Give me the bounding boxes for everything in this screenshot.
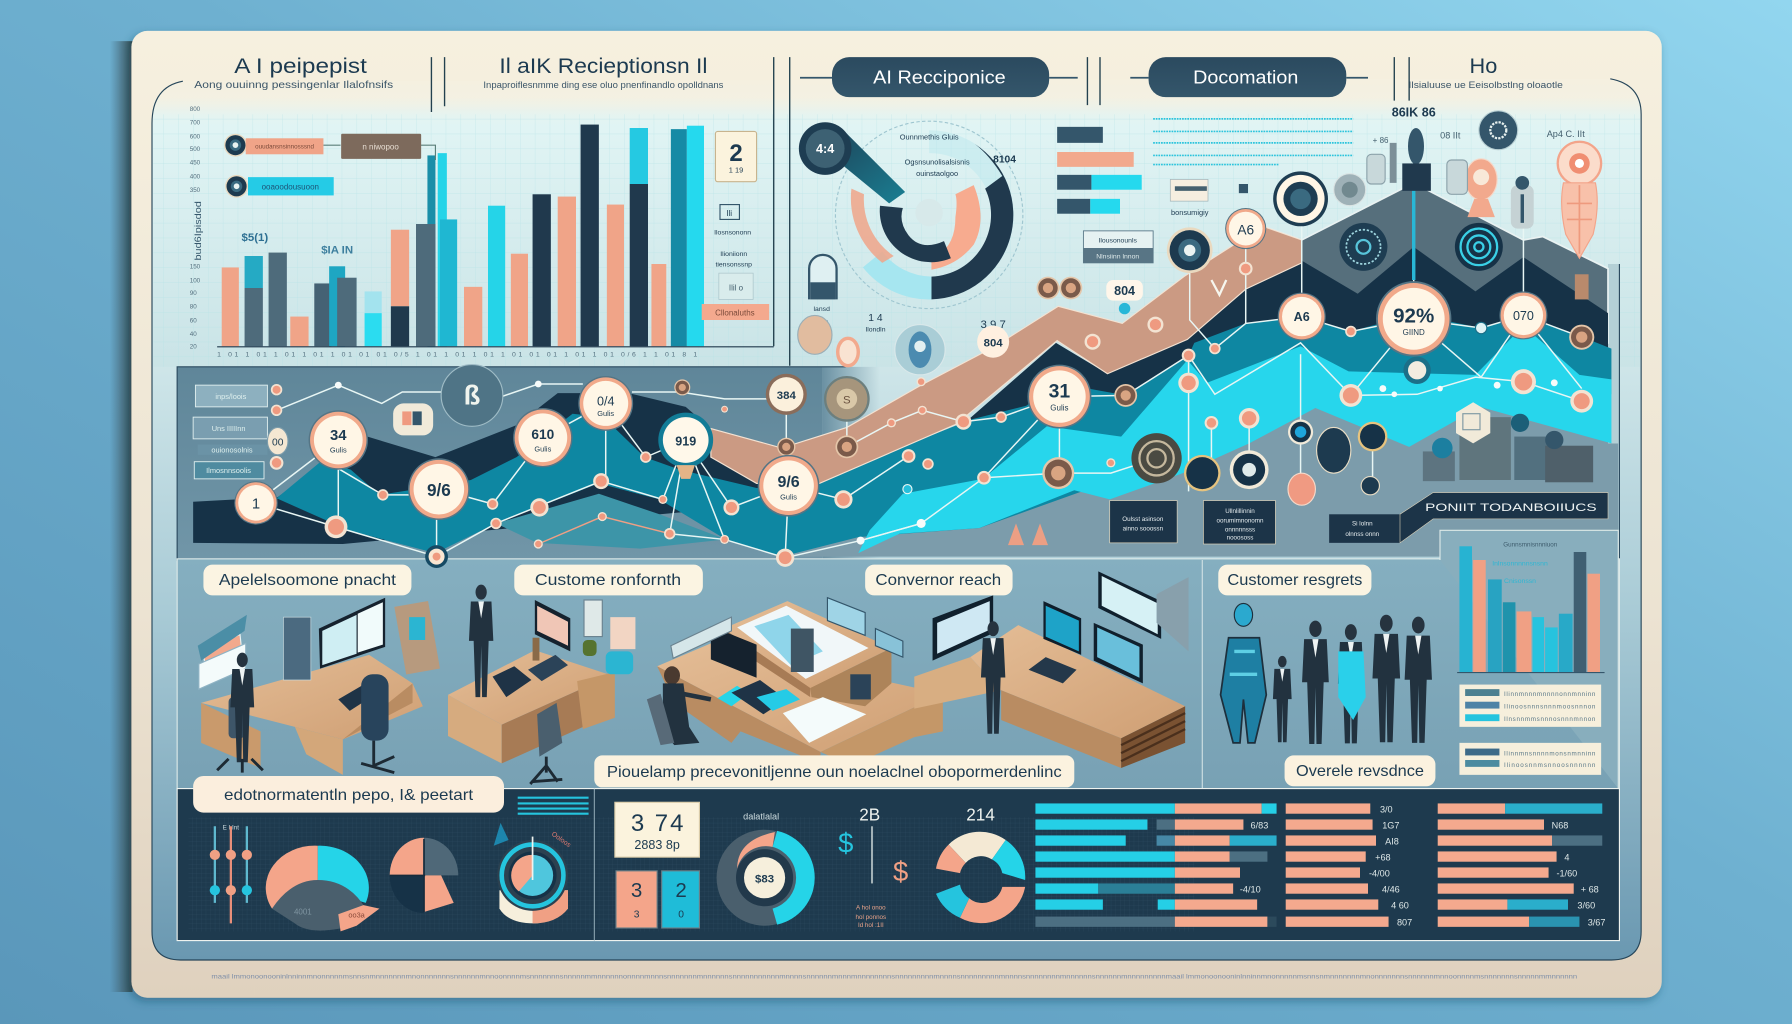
x axis labels: 1 01 1 01 1 01 1 01 1 01 01 01 0/5 1 01 1 01 1 01 1 01 01 01 1 01 1 01 0/6 1 1 01 8 1 [217,352,697,359]
heading: AI pipeline [194,53,393,91]
pill label: Application [203,565,411,595]
left flow nodes: ß [464,380,480,411]
pie chart one [266,846,379,931]
stat card: 3 74: 2883 8p [634,838,680,852]
y axis labels: 90 [190,290,197,297]
panel: bottom dark dashboard [177,789,1619,941]
y axis labels: 450 [190,160,201,167]
bar table: column two: 4/46 [1382,885,1400,895]
dollar chart: 2B [859,805,880,825]
dark info boxes: nooososs [1227,534,1253,541]
left flow labels: Ilmosnnsoolis [206,466,251,475]
sliders [210,825,252,923]
callout: peach note: Cllonaluths [715,308,755,317]
left flow nodes: S [843,394,851,406]
dark info boxes [1110,501,1400,544]
y axis labels: 500 [190,146,201,153]
dollar chart: hol ponnos [856,914,886,921]
bar table: column three [1438,803,1605,928]
y axis labels: 350 [190,187,201,194]
left flow big value nodes: 9/6 [777,474,800,491]
small chart notes: Ilioniionn [720,251,747,258]
left mini icons: lansd [814,306,830,313]
dark info boxes: Oulsst asinson [1122,516,1164,523]
stat card: 2: 1 19 [729,166,743,175]
figure: suit four [1405,617,1432,743]
heading: AI receptionist: Il aIK Recieptionsn Il [499,53,707,78]
right flow nodes: Gulis [1050,403,1069,412]
donut chart: AI receptionist [799,121,1023,309]
pill label: overall revenue [1285,755,1435,786]
header dividers [431,57,1409,366]
left flow big value nodes: Gulis [330,446,347,455]
right flow nodes: A6 [1294,310,1310,324]
y axis labels: 60 [190,317,197,324]
footer note: maail lmmonoonooninlnninnmnonnnnnmsnnsnmnnnnnnnmnonnnnnnnsnnnnnnmnnoonnnnmsnnnnnnnsnnnnnmmnnnnnnonnnnmnnnsnnnnnnnmnnnnnnsnnnnnnnnnnnmnnnnsnnnnnnmnnnmnnnnnnnnsnnnnnnnnnmnnnnsnnnnnnnnnmnnnnsnnnnnnnnmnnnnnnsnnnnnnmnnnnnnnnnmaail lmmonoonooninlnninnmnonnnnnmsnnsnmnnnnnnnmnonnnnnnnsnnnnnnmnnoonnnnmsnnnnnnnsnnnnnmmnnnnnn [211,973,1578,980]
bar table: column three: + 68 [1581,885,1599,895]
dark info boxes: oorumimnonomn [1216,517,1264,524]
legend card one: Ilnsnnmmsnnnosnnnmnnon [1504,716,1596,723]
pill label: overall revenue: Overele revsdnce [1296,763,1424,780]
figure: suit two [1302,621,1329,744]
bar table: column two: +68 [1375,853,1391,863]
left flow big value nodes: 384 [777,390,796,402]
figure: suit one [1273,656,1292,742]
target gauge [494,823,572,923]
bar table: column three: 3/67 [1588,918,1605,928]
scene: desk four [914,571,1189,768]
pill label: Customer regrets [1218,565,1371,595]
donut chart: bottom centre: dalatlalal [743,811,779,821]
legend card one: Ilinoosnnnsnnnmoosnnnon [1504,704,1596,711]
panel: process flow band [177,367,1618,561]
target gauge: Ooloos [550,831,572,849]
cyan lines [518,798,589,814]
small chart notes: tiensonssnp [715,261,752,268]
y axis labels [190,106,203,351]
heading: AI pipeline: A I peipepist [234,53,367,78]
left flow big value nodes: Gulis [597,409,614,418]
legend card one [1459,685,1601,727]
bar table: column three: -1/60 [1556,869,1577,879]
left flow nodes [267,365,971,568]
bar table: column two: 3/0 [1380,805,1393,815]
pill heading: AI Receptionist [800,57,1078,97]
left flow big value nodes: 1 [252,497,260,513]
heading: Ho: Ho [1470,53,1497,78]
mini document icon: bonsumigiy [1171,208,1209,217]
bar table: column two: 4 60 [1391,901,1409,911]
pill label: Customer: Custome ronfornth [535,572,681,589]
sliders: E I Int [223,825,239,832]
dollar chart: Id hol :1II [858,922,884,929]
value label: $IA IN [321,245,353,257]
scene: desk one [198,598,440,775]
right flow nodes: GIIND [1403,328,1425,337]
bar table: column two: 807 [1397,918,1412,928]
pill label: Conversion reach: Convernor reach [875,572,1001,589]
pointer with value [799,122,905,203]
dollar chart: $ [838,828,853,859]
right flow nodes: A6 [1237,222,1254,237]
panel: upper chart background [153,97,1640,367]
pill label: bottom left: edotnormatentln pepo, I& peetart [224,787,474,804]
panel: right lower box [1440,530,1618,789]
pie chart one: oo3a [348,911,366,920]
stat tile: cyan: 0 [678,910,684,921]
panel: mid section [177,559,1619,790]
dollar chart: A hol onoo [856,905,886,912]
pie chart one: 4001 [294,907,312,916]
left flow labels: Uns IIIIInn [212,424,245,433]
pill label: bottom center [594,755,1074,787]
callout: peach legend: n niwopoo [362,143,399,152]
small chart notes: Ilosnsononn [714,229,751,236]
pill label: Customer [514,565,703,595]
left mini icons: 1 4 [868,313,883,324]
left flow big value nodes: 9/6 [427,480,451,500]
bar table: column three: N68 [1552,821,1568,831]
dollar chart [838,805,908,929]
callout: peach legend: ouudansnsinnosssnd [255,144,315,151]
donut captions: Ogsnsunolisalsisnis [905,158,970,167]
donut captions [900,132,1016,178]
left mini icons: 804 [1114,284,1135,298]
top right values and icons: 08 IIt [1440,130,1461,140]
bar table: column one [1035,803,1277,927]
value labels: $5(1) [242,232,268,244]
small info box [1083,231,1153,263]
pill heading: AI Receptionist: AI Recciponice [873,66,1006,87]
small chart notes: Ilil o [729,283,744,292]
icon: peach bulb figure [1558,142,1601,258]
y axis labels: 700 [190,120,201,127]
left mini icons: sinns [815,319,829,325]
top right values and icons: Ap4 C. IIt [1547,129,1585,139]
top right values and icons: + 86 [1373,136,1389,145]
pointer with value: 4:4 [816,142,834,156]
small info box: Ilousonounls [1098,237,1138,244]
donut captions: ouinstaolgoo [916,169,958,178]
y axis labels: 400 [190,173,201,180]
donut captions: Ounnmethis Gluis [900,132,959,141]
bar table: column two: 1G7 [1382,821,1399,831]
bar table: column three: 3/60 [1577,901,1595,911]
mini document icon [1170,179,1248,217]
donut captions: 8104 [993,154,1016,165]
left flow big value nodes [234,374,819,525]
y axis labels: 600 [190,133,201,140]
dark info boxes: Si lolnn [1352,521,1373,528]
y axis labels: 100 [190,277,201,284]
divider line [1201,560,1203,789]
stat tile: peach: 3 [634,910,640,921]
ring chart [936,805,1025,923]
left flow big value nodes: Gulis [534,444,552,453]
left flow big value nodes: 34 [330,428,347,444]
left flow labels: ouionosolnis [211,446,253,455]
heading: Ho: Ilsialuuse ue Eeisolbstlng oloaotle [1409,80,1563,90]
heading: AI receptionist: Inpaproiflesnmme ding ese oluo pnenfinandlo opolldnans [483,80,724,90]
bar table: column one: 6/83 [1251,821,1268,831]
legend card one: Ilinnmnnnmnnnnonnmnninn [1504,691,1596,698]
bar chart: main [190,106,774,359]
top right values and icons: 86IK 86 [1392,106,1436,120]
left flow big value nodes: 610 [531,427,555,442]
callout: cyan legend [225,175,334,198]
right flow nodes [977,171,1594,505]
stat tile: peach: 3 [631,879,642,902]
left mini icons: 3 9 7 [980,319,1006,331]
legend card two [1459,743,1601,775]
mini bar chart: Gunnsmnisnnniuon [1503,541,1558,548]
small chart notes [714,205,753,299]
banner: point commodities [1400,493,1608,543]
left mini icons: 804 [984,337,1003,349]
y axis labels: 80 [190,304,197,311]
scene: desk two [448,585,635,784]
left mini icons: Ilondln [865,326,886,333]
pill heading: Documentation [1130,57,1368,97]
frame fill with curved corners [152,79,1641,960]
dark info boxes: olnnss onnn [1345,531,1380,538]
right flow nodes: 31 [1049,381,1070,403]
small info box: Nlnsiinn lnnon [1096,253,1139,260]
left flow big value nodes: 919 [675,435,696,449]
pie chart two [390,838,458,913]
pill label: bottom left [193,776,504,813]
pill label: Customer regrets: Customer resgrets [1227,572,1362,589]
card left shadow [110,41,133,992]
mini bar chart [1457,541,1605,673]
legend bars [1057,127,1142,214]
left flow big value nodes: Gulis [780,492,797,501]
bars [217,125,774,347]
ring chart: 214 [966,805,995,825]
figure: robot [1221,603,1266,743]
dollar chart: $ [893,856,908,887]
icon cluster [1379,379,1593,482]
dark info boxes: Ullnlillinnin [1225,508,1255,515]
heading: AI pipeline: Aong ouuinng pessingenlar Ilalofnsifs [194,80,393,91]
left flow labels [193,385,267,479]
dark info boxes: ainno sooossn [1123,525,1164,532]
stat tile: cyan: 2 [675,879,687,902]
banner: point commodities: PONIIT TODANBOIIUCS [1425,502,1597,514]
y axis labels: 20 [190,344,197,351]
stat card: 2: 2 [729,140,743,167]
legend card two: Ilinnmnsnnnnmonsnmnninn [1504,750,1596,757]
bar table: column two [1286,803,1412,928]
left mini icons [798,255,1226,375]
left flow labels: inps/loois [215,392,247,401]
legend card two: Ilinoosnnmsnnoosnnnnnn [1504,762,1596,769]
donut chart: bottom centre [717,811,815,926]
mini bar chart: Inlnsonnnnnsnsnn [1492,561,1548,568]
connector lines [256,190,1582,558]
heading: Ho [1409,53,1563,90]
mini bar chart: Cnisonssn [1504,578,1536,585]
left flow nodes: 00 [272,438,284,449]
y axis labels: 40 [190,331,197,338]
stat card: 3 74: 3 74 [631,810,683,837]
callout: cyan legend: ooaoodousuoon [262,183,319,192]
peach markers [1008,523,1048,545]
left flow big value nodes: 0/4 [597,395,614,409]
dashed text lines [1153,119,1353,165]
heading: AI receptionist [483,53,724,90]
pill heading: Documentation: Docomation [1193,66,1298,87]
area layers [193,183,1611,557]
figure: suit three [1372,615,1400,742]
icon: resistor [1575,274,1589,299]
right flow nodes: 070 [1513,309,1534,323]
bar table: column two: -4/00 [1369,869,1390,879]
callout: peach note [702,304,769,320]
pill label: Conversion reach [865,565,1013,595]
y axis labels: 150 [190,264,201,271]
frame outline [152,79,1641,960]
bar table: column one: -4/10 [1240,885,1261,895]
right flow nodes: 92% [1393,304,1434,327]
stat tile: cyan [662,871,699,928]
dark info boxes: onnnnnsss [1225,526,1255,533]
y axis labels: 800 [190,106,201,113]
figures: customers [1221,603,1432,744]
callout: peach legend [224,134,435,160]
bar table: column three: 4 [1564,853,1569,863]
scene: desk three [647,598,943,766]
stat tile: peach [616,871,657,928]
top right values and icons [798,106,1601,375]
stat card: 3 74 [615,802,699,857]
figure: cyan suit [1338,624,1366,743]
right edge strip [1608,264,1619,941]
stat card: 2 [715,131,757,182]
y axis labels: bud6Ipisdod [193,201,203,261]
bar table: column two: AI8 [1385,837,1399,847]
donut chart: bottom centre: $83 [755,873,774,885]
small chart notes: Ili [726,209,732,218]
pill label: bottom center: Piouelamp precevonitljenne oun noelaclnel obopormerdenlinc [607,764,1062,781]
pill label: Application: Apelelsoomone pnacht [219,572,397,589]
